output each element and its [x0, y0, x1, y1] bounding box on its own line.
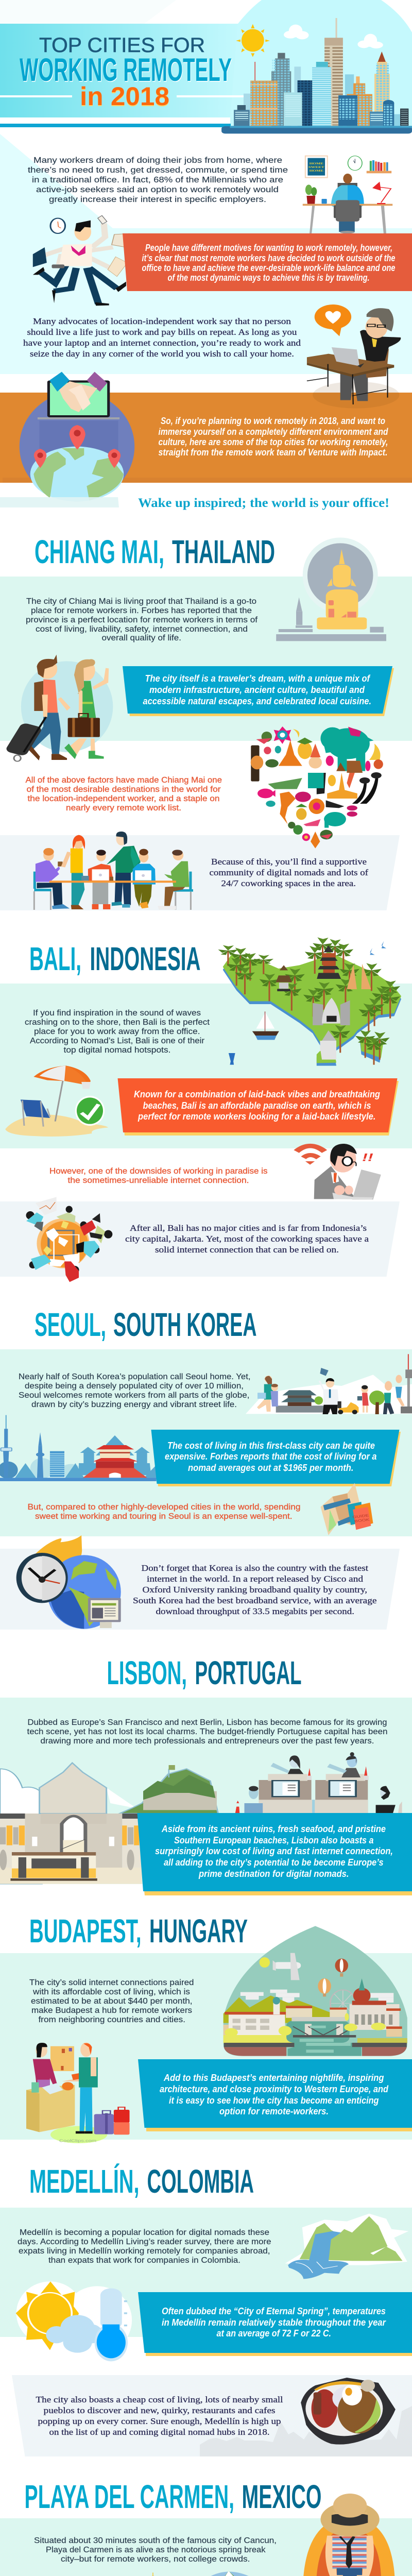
callout: Budapest nightlife [138, 2059, 412, 2131]
text block: fastest internet: Oxford University ranking broadband quality by country, [142, 1585, 367, 1595]
illustration: mountains and waterfall [285, 2214, 408, 2279]
background: gray panel [0, 835, 400, 910]
background: gray panel [12, 2375, 412, 2456]
illustration: Seoul skyline [0, 1415, 157, 1481]
title line 2: WORKING REMOTELY [20, 53, 232, 89]
text block: location-independent advocates [23, 316, 301, 359]
heading: Lisbon: LISBON, [107, 1654, 187, 1691]
illustration: city skyline [221, 18, 412, 133]
illustration: Lisbon arch and tram [0, 1763, 218, 1884]
text block: fastest internet: Don’t forget that Korea is also the country with the fastest [141, 1563, 368, 1573]
text block: intro paragraph: in a traditional office. In fact, 68% of the Millennials who are [32, 176, 283, 184]
text block: Budapest intro: The city’s solid internet connections paired [29, 1978, 194, 1987]
text block: Medellín intro: days. According to Medellín Living’s reader survey, there are more [18, 2238, 271, 2246]
text block: cheap cost of living: The city also boasts a cheap cost of living, lots of nearby small [36, 2395, 283, 2404]
callout: Lisbon low cost: prime destination for digital nomads. [198, 1869, 349, 1879]
text block: orange Chiang Mai note: of the most desirable destinations in the world for [27, 785, 221, 794]
illustration: beach umbrella and chair [5, 1065, 108, 1137]
text block: orange Bali downside [49, 1167, 268, 1185]
heading: Bali: INDONESIA [90, 940, 201, 977]
decorative city silhouette [200, 2406, 412, 2456]
background: mint band [0, 577, 412, 741]
text block: Budapest intro [29, 1978, 194, 2024]
callout: traveler's dream: accessible natural escapes, and celebrated local cuisine. [143, 696, 371, 706]
callout: Seoul cost of living: nomad averages out at $1965 per month. [188, 1463, 353, 1473]
illustration: Budapest dome cityscape [224, 1926, 407, 2056]
illustration: sun cloud and thermometer [16, 2281, 132, 2361]
callout: City of Eternal Spring: in Medellín remain relatively stable throughout the year [162, 2317, 386, 2328]
callout: red motives box: of the most dynamic ways to achieve this is by traveling. [168, 273, 370, 283]
illustration: worried man with wifi: !! [362, 1151, 373, 1163]
text block: fastest internet: internet in the world. In a report released by Cisco and [147, 1574, 364, 1584]
callout: Lisbon low cost [137, 1813, 412, 1895]
text block: orange Chiang Mai note: All of the above factors have made Chiang Mai one [26, 776, 222, 785]
text block: fastest internet: South Korea had the best broadband service, with an average [133, 1596, 377, 1605]
text block: Bali connectivity [125, 1223, 369, 1255]
callout: Bali laid-back vibes: beaches, Bali is an affordable paradise on earth, which is [143, 1100, 371, 1111]
callout: Seoul cost of living: expensive. Forbes reports that the cost of living for a [165, 1451, 377, 1462]
text block: Playa intro: city–but for remote workers, not college crowds. [61, 2555, 250, 2564]
text block: Bali intro: place for you to work away from the office. [34, 1027, 200, 1036]
callout: Lisbon low cost: surprisingly low cost of living and fast internet connection, [155, 1846, 393, 1856]
text block: Seoul intro: despite being a densely populated city of over 10 million, [25, 1382, 244, 1391]
illustration: home office worker: HOME [310, 169, 323, 173]
callout: City of Eternal Spring: at an average of 72 F or 22 C. [216, 2328, 331, 2338]
illustration: traveling couple [5, 655, 113, 761]
text block: Bali connectivity: city capital, Jakarta. Yet, most of the coworking spaces have a [125, 1234, 369, 1244]
panel: hero header [0, 0, 412, 133]
text block: orange Seoul note: But, compared to other highly-developed cities in the world, spending [28, 1503, 301, 1512]
text block: Lisbon intro: tech scene, yet has not lost its local charms. The budget-friendly Portuguese capital has been [27, 1727, 387, 1736]
text block: Chiang Mai intro: The city of Chiang Mai is living proof that Thailand is a go-to [26, 597, 256, 606]
title line 2 [20, 52, 232, 89]
callout: Seoul cost of living: The cost of living in this first-class city can be quite [167, 1440, 375, 1451]
callout: Bali laid-back vibes: Known for a combination of laid-back vibes and breathtaking [134, 1089, 380, 1099]
text block: Seoul intro: Nearly half of South Korea’s population call Seoul home. Yet, [19, 1372, 250, 1381]
text block: location-independent advocates: should live a life just to work and pay bills on repeat. As long as you [27, 327, 297, 337]
text block: Budapest intro: from neighboring countries and cities. [38, 2015, 185, 2024]
background: mint band [0, 1349, 412, 1536]
panel: Bali, Indonesia [0, 937, 412, 1282]
illustration: map and guide book: BOOK [354, 1517, 370, 1523]
callout: Lisbon low cost: all adding to the city’s potential to be become Europe’s [164, 1857, 383, 1868]
text block: Budapest intro: with its affordable cost of living, which is [32, 1988, 190, 1996]
illustration: map and guide book [320, 1483, 373, 1535]
callout: City of Eternal Spring: Often dubbed the “City of Eternal Spring”, temperatures [162, 2306, 386, 2316]
illustration: relaxed man at laptop [307, 304, 401, 409]
palace [276, 1390, 330, 1413]
background: orange band [0, 393, 412, 483]
illustration: tech office workers [235, 1752, 402, 1814]
elephant [320, 727, 374, 771]
callout: Bali laid-back vibes: perfect for remote workers looking for a laid-back lifestyle. [138, 1111, 376, 1122]
text block: Chiang Mai intro: place for remote workers in. Forbes has reported that the [31, 606, 252, 615]
text block: intro paragraph: greatly increase their interest in specific employers. [49, 195, 266, 204]
background: light cyan panel [0, 134, 412, 374]
heading: Budapest: HUNGARY [149, 1912, 248, 1950]
illustration: travel agent and customer: CoolClips.com [59, 2139, 96, 2143]
text block: coworking community: Because of this, you’ll find a supportive [211, 857, 367, 867]
split gate [347, 964, 371, 989]
illustration: Thai icons heart [251, 726, 383, 849]
text block: cheap cost of living: on the list of up and coming digital nomad hubs in 2018. [49, 2427, 270, 2437]
text block: Lisbon intro: Dubbed as Europe’s San Francisco and next Berlin, Lisbon has become famous for its growing [28, 1718, 387, 1727]
heading: Medellín: COLOMBIA [147, 2163, 254, 2200]
city ground [221, 126, 412, 133]
callout: Lisbon low cost: Aside from its ancient ruins, fresh seafood, and pristine [161, 1824, 386, 1834]
illustration: home office worker [303, 156, 392, 233]
sailboat [252, 1011, 279, 1040]
heading: Chiang Mai: THAILAND [172, 533, 275, 570]
title line 1: TOP CITIES FOR [39, 34, 205, 57]
taxi [338, 1402, 358, 1414]
text block: location-independent advocates: have your laptop and an internet connection, you’re ready to work and [23, 338, 301, 348]
text block: Bali intro: If you find inspiration in the sound of waves [33, 1009, 201, 1018]
text block: planning to work remotely: straight from the remote work team of Venture with Impact. [159, 447, 387, 457]
text block: Bali intro [25, 1009, 210, 1055]
text block: Playa intro [34, 2536, 277, 2564]
illustration: bandeja paisa plate [301, 2378, 396, 2445]
panel: Lisbon, Portugal [0, 1654, 412, 1895]
panel: Chiang Mai, Thailand [0, 533, 412, 910]
illustration: map and guide book: GUIDE [352, 1513, 370, 1519]
text block: Budapest intro: estimated to be at about $440 per month, [31, 1997, 193, 2006]
text block: Lisbon intro: drawing more and more tech professionals and entrepreneurs over the past few years. [40, 1737, 374, 1745]
text block: orange Bali downside: the sometimes-unreliable internet connection. [68, 1176, 249, 1185]
illustration: worried man with wifi [297, 1144, 381, 1199]
text block: planning to work remotely [159, 416, 388, 457]
text block: location-independent advocates: Many advocates of location-independent work say that no person [33, 316, 291, 326]
illustration: multitasking businessman [33, 215, 129, 306]
heading: Seoul: SEOUL, [35, 1306, 106, 1343]
title line 2: WORKING REMOTELY [20, 52, 232, 88]
text block: cheap cost of living [36, 2395, 283, 2437]
icon: clouds [284, 25, 383, 48]
wooden shrine [276, 965, 292, 991]
background: mint band [0, 1953, 412, 2140]
callout: red motives box [123, 233, 412, 291]
illustration: mountains and campsite [118, 2571, 297, 2576]
icon: sun [236, 24, 270, 57]
shopper woman and child [257, 1376, 278, 1412]
text block: Budapest intro: make Budapest a hub for remote workers [31, 2006, 192, 2015]
illustration: golden Buddha [276, 537, 386, 641]
callout: Lisbon low cost: Southern European beaches, Lisbon also boasts a [174, 1835, 374, 1845]
heading: Seoul: SOUTH KOREA [113, 1306, 256, 1343]
pagoda [317, 945, 341, 979]
background: mint band [0, 2208, 412, 2337]
white temple [313, 998, 350, 1025]
callout: City of Eternal Spring [138, 2292, 412, 2356]
text block: orange Chiang Mai note: the location-independent worker, and a staple on [28, 794, 219, 803]
businessman [318, 1368, 341, 1414]
text block: intro paragraph [28, 156, 288, 204]
text block: Chiang Mai intro: cost of living, livability, safety, internet connection, and [36, 625, 248, 634]
text block: Medellín intro: expats living in Medellín working remotely for companies abroad, [19, 2247, 270, 2256]
callout: Budapest nightlife: it is easy to see how the city has become an enticing [169, 2095, 379, 2106]
heading: Lisbon: PORTUGAL [195, 1654, 302, 1691]
text block: Playa intro: Situated about 30 minutes south of the famous city of Cancun, [34, 2536, 277, 2545]
subheading: wake up inspired: Wake up inspired; the world is your office! [138, 496, 389, 510]
text block: Seoul intro [19, 1372, 250, 1409]
heading: Seoul [35, 1306, 256, 1343]
text block: Bali connectivity: After all, Bali has no major cities and is far from Indonesia’s [130, 1223, 367, 1233]
text block: fastest internet [133, 1563, 377, 1616]
text block: Playa intro: Playa del Carmen is as alive as the notorious spring break [46, 2546, 266, 2554]
text block: Bali intro: crashing on to the shore, then Bali is the perfect [25, 1018, 210, 1027]
illustration: man in hat with laptop from above [302, 2494, 394, 2576]
callout: traveler's dream [123, 666, 394, 716]
text block: Medellín intro: Medellín is becoming a popular location for digital nomads these [20, 2228, 269, 2237]
text block: cheap cost of living: pueblos to discover and new, quirky, restaurants and cafes [43, 2405, 275, 2415]
text block: Bali intro: top digital nomad hotspots. [64, 1046, 171, 1055]
text block: Chiang Mai intro: overall quality of life. [102, 634, 181, 642]
heading: Bali [29, 940, 201, 977]
background: mint band [0, 984, 412, 1148]
hero background band [0, 24, 242, 117]
text block: Medellín intro [18, 2228, 271, 2265]
text block: location-independent advocates: seize the day in any corner of the world you wish to call your home. [30, 349, 294, 359]
text block: orange Chiang Mai note: nearly every remote work list. [66, 804, 181, 812]
illustration: home office worker: SWEET [308, 165, 324, 169]
illustration: burning clock and globe [19, 1535, 121, 1629]
text block: Chiang Mai intro: province is a perfect location for remote workers in terms of [26, 616, 258, 624]
panel: Budapest, Hungary [0, 1912, 412, 2143]
text block: Bali intro: According to Nomad’s List, Bali is one of their [30, 1037, 205, 1045]
text block: Bali connectivity: solid internet connection that can be relied on. [155, 1245, 339, 1255]
text block: orange Bali downside: However, one of the downsides of working in paradise is [49, 1167, 268, 1176]
text block: fastest internet: download throughput of 33.5 megabits per second. [156, 1606, 354, 1616]
flower and fruit [274, 726, 291, 744]
panel: Playa del Carmen, Mexico [0, 2478, 412, 2576]
lower icons [268, 778, 302, 789]
heading: Playa del Carmen: PLAYA DEL CARMEN, [25, 2478, 234, 2515]
text block: orange Seoul note: sweet time working and touring in Seoul is an expense well-spent. [35, 1512, 293, 1521]
callout: Budapest nightlife: Add to this Budapest’s entertaining nightlife, inspiring [163, 2073, 384, 2083]
title line 3: in 2018 [80, 83, 169, 112]
callout: traveler's dream: The city itself is a traveler’s dream, with a unique mix of [145, 673, 371, 684]
text block: orange Chiang Mai note [26, 776, 222, 812]
text block: Seoul intro: Seoul welcomes remote workers from all parts of the globe, [19, 1391, 250, 1400]
heading: Playa del Carmen: MEXICO [242, 2478, 321, 2515]
text block: Chiang Mai intro [26, 597, 258, 642]
text block: coworking community [209, 857, 369, 888]
background: mint band [0, 1698, 412, 1884]
callout: Budapest nightlife: option for remote-workers. [219, 2106, 329, 2116]
heading: Chiang Mai: CHIANG MAI, [35, 533, 164, 570]
illustration: Seoul people and landmarks [246, 1354, 412, 1414]
text block: intro paragraph: Many workers dream of doing their jobs from home, where [33, 156, 282, 165]
callout: Seoul cost of living [151, 1430, 401, 1486]
callout: traveler's dream: modern infrastructure, ancient culture, beautiful and [149, 685, 365, 695]
background: gray panel [0, 1201, 400, 1277]
heading: Lisbon [107, 1654, 302, 1691]
text block: coworking community: 24/7 coworking spaces in the area. [221, 878, 356, 888]
panel: Seoul, South Korea [0, 1306, 412, 1630]
text block: Lisbon intro [27, 1718, 387, 1745]
illustration: meeting table from above [26, 1197, 112, 1282]
decorative ledge [0, 497, 119, 507]
title line 3: in 2018 [80, 82, 169, 111]
illustration: Bali island map [218, 937, 401, 1066]
illustration: travel agent and customer [26, 2042, 130, 2143]
illustration: coworking team [33, 832, 193, 910]
panel: Medellín, Colombia [0, 2163, 412, 2456]
heading: Bali: BALI, [29, 940, 81, 977]
hero sky dome [230, 0, 412, 126]
text block: Medellín intro: than expats that work for companies in Colombia. [48, 2256, 241, 2265]
title side rules [0, 95, 245, 97]
callout: Budapest nightlife: architecture, and close proximity to Western Europe, and [160, 2084, 389, 2094]
background: mint band [0, 2518, 412, 2576]
text block: Seoul intro: drawn by city’s buzzing energy and vibrant street life. [31, 1400, 237, 1409]
illustration: handshake over globe [20, 372, 134, 501]
heading: Budapest: BUDAPEST, [29, 1912, 141, 1950]
children and tree [357, 1375, 405, 1414]
text block: cheap cost of living: popping up on every corner. Sure enough, Medellín is high up [38, 2416, 281, 2426]
text block: coworking community: community of digital nomads and lots of [209, 868, 369, 877]
text block: intro paragraph: there’s no need to rush, get dressed, commute, or spend time [28, 166, 288, 175]
text block: intro paragraph: active-job seekers said an option to work remotely would [36, 185, 279, 194]
illustration: home office worker: HOME [310, 162, 323, 165]
heading: Medellín: MEDELLÍN, [29, 2163, 139, 2200]
text block: orange Seoul note [28, 1503, 301, 1521]
callout: Bali laid-back vibes [117, 1078, 399, 1136]
background: gray panel [0, 1549, 400, 1630]
hero underline bar [0, 124, 231, 127]
